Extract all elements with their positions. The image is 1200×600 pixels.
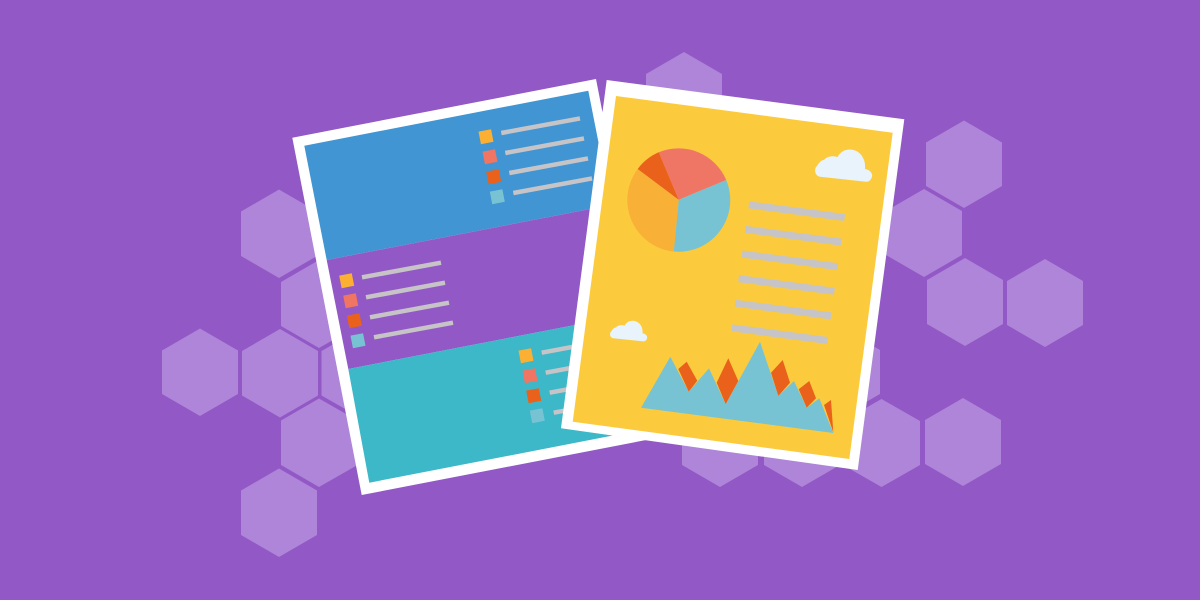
left document: blue band [304, 91, 611, 260]
hexagon cluster: left [162, 190, 398, 557]
icon: small cloud [610, 321, 647, 341]
legend: purple band [339, 263, 453, 348]
legend: teal band [518, 338, 632, 423]
icon: large cloud [815, 149, 872, 182]
right document [561, 80, 904, 470]
legend: blue band [478, 118, 592, 204]
right document: yellow page [573, 96, 893, 459]
left document: white paper [292, 79, 665, 495]
pie chart [627, 148, 730, 252]
left document: teal band [348, 314, 653, 483]
hexagon cluster: right [646, 52, 1083, 487]
area chart [641, 342, 833, 433]
right document: white paper [561, 80, 904, 470]
left document: purple band [327, 205, 632, 369]
text lines [732, 205, 845, 340]
left document [292, 79, 665, 495]
